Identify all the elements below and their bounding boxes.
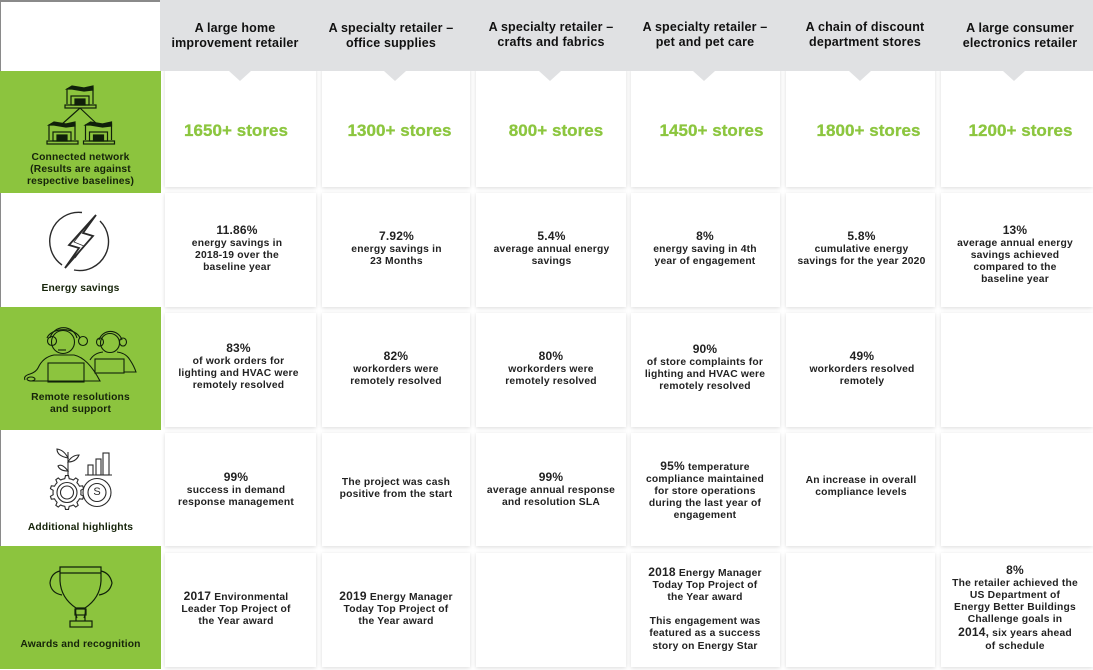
value: remote column 2: remotely resolved (350, 376, 442, 387)
value: awards column 1: the Year award (198, 616, 274, 627)
label: remote resolutions: Remote resolutions (31, 392, 130, 403)
value: awards column 4: featured as a success (649, 628, 761, 639)
value: energy column 6: compared to the (973, 262, 1057, 273)
value: awards column 6: The retailer achieved the (952, 578, 1078, 589)
value: energy column 2: 23 Months (370, 256, 423, 267)
icon: support agents (24, 327, 137, 383)
value: energy column 5: cumulative energy (815, 244, 908, 255)
icon: gears and chart (50, 448, 112, 510)
store count: column 2: 1300+ stores (347, 121, 452, 140)
value: energy column 5 (797, 229, 926, 267)
value: highlights column 2: The project was cash (342, 477, 450, 488)
value: energy column 2: energy savings in (351, 244, 442, 255)
value: highlights column 1 (178, 470, 294, 508)
value: remote column 4: lighting and HVAC were (645, 369, 765, 380)
value: energy column 5: savings for the year 2020 (797, 256, 926, 267)
value: awards column 6: 8% (1006, 563, 1024, 577)
value: remote column 4 (645, 342, 765, 392)
value: highlights column 1: response management (178, 497, 294, 508)
arrow: column 2 (384, 71, 406, 81)
store count: column 1: 1650+ stores (184, 121, 288, 140)
arrow: column 3 (539, 71, 561, 81)
value: energy column 3: savings (532, 256, 571, 267)
value: highlights column 4: for store operations (654, 486, 756, 497)
value: remote column 4: 90% (693, 342, 717, 356)
value: remote column 1: 83% (226, 341, 251, 355)
heading: crafts and fabrics (489, 20, 613, 49)
value: remote column 1: lighting and HVAC were (178, 368, 299, 379)
heading: crafts and fabrics: A specialty retailer – (489, 20, 613, 34)
value: awards column 4: 2018 Energy Manager (648, 565, 762, 579)
label: awards: Awards and recognition (20, 639, 141, 650)
label: connected network (27, 152, 134, 187)
value: awards column 6: US Department of (970, 590, 1060, 601)
value: highlights column 4: compliance maintained (646, 474, 764, 485)
value: awards column 1 (181, 589, 291, 627)
value: awards column 4 (648, 565, 762, 652)
heading: discount stores: A chain of discount (806, 20, 924, 34)
dollar sign in gear: S (93, 486, 101, 498)
value: remote column 1: of work orders for (193, 356, 284, 367)
heading: home improvement: A large home (195, 21, 275, 35)
header band (160, 0, 1093, 71)
value: energy column 6 (957, 223, 1073, 285)
value: awards column 2 (339, 589, 453, 627)
store count: column 6: 1200+ stores (968, 121, 1073, 140)
heading: consumer electronics: A large consumer (966, 21, 1074, 35)
value: highlights column 3: 99% (539, 470, 563, 484)
heading: home improvement: improvement retailer (171, 36, 299, 50)
label: remote resolutions: and support (50, 404, 111, 415)
value: remote column 2 (350, 349, 442, 387)
panel: connected network (0, 71, 161, 193)
value: energy column 1: 2018-19 over the (195, 250, 279, 261)
label: energy savings: Energy savings (41, 283, 120, 294)
value: energy column 4: energy saving in 4th (653, 244, 757, 255)
value: awards column 2: 2019 Energy Manager (339, 589, 453, 603)
value: energy column 6: savings achieved (971, 250, 1059, 261)
value: highlights column 4 (646, 459, 764, 521)
icon: trophy (49, 566, 113, 628)
value: highlights column 3: and resolution SLA (502, 497, 600, 508)
panel: energy savings (41, 212, 120, 294)
value: highlights column 1: success in demand (187, 485, 285, 496)
value: highlights column 3: average annual response (487, 485, 615, 496)
value: awards column 4: This engagement was (650, 616, 760, 627)
value: highlights column 4: engagement (674, 510, 736, 521)
arrow: column 5 (849, 71, 871, 81)
value: awards column 4: Today Top Project of (653, 580, 757, 591)
value: energy column 4: year of engagement (655, 256, 755, 267)
label: connected network: Connected network (32, 152, 129, 163)
value: remote column 5: workorders resolved (809, 364, 915, 375)
value: highlights column 2 (340, 477, 452, 500)
value: highlights column 3 (487, 470, 615, 508)
value: awards column 4: story on Energy Star (652, 641, 758, 652)
value: highlights column 1: 99% (224, 470, 248, 484)
heading: discount stores (806, 20, 924, 49)
store count: column 3: 800+ stores (509, 121, 603, 140)
value: remote column 3: remotely resolved (505, 376, 597, 387)
value: remote column 5: 49% (850, 349, 874, 363)
value: highlights column 5: compliance levels (815, 487, 907, 498)
value: energy column 2: 7.92% (379, 229, 414, 243)
value: awards column 2: Today Top Project of (344, 604, 448, 615)
value: energy column 6: average annual energy (957, 238, 1073, 249)
value: awards column 6: 2014, six years ahead (958, 625, 1072, 639)
heading: office supplies: office supplies (346, 36, 436, 50)
value: remote column 3 (505, 349, 597, 387)
value: highlights column 5: An increase in overall (806, 475, 916, 486)
heading: pet care: A specialty retailer – (643, 20, 767, 34)
arrow: column 6 (1003, 71, 1025, 81)
heading: pet care (643, 20, 767, 49)
value: energy column 3 (494, 229, 610, 267)
value: remote column 2: workorders were (353, 364, 439, 375)
value: awards column 1: Leader Top Project of (181, 604, 291, 615)
value: awards column 6: Challenge goals in (968, 614, 1062, 625)
value: remote column 5 (809, 349, 915, 387)
arrow: column 1 (229, 71, 251, 81)
value: energy column 2 (351, 229, 442, 267)
value: remote column 1 (178, 341, 299, 391)
value: awards column 6: Energy Better Buildings (954, 602, 1076, 613)
store count: column 4: 1450+ stores (659, 121, 764, 140)
icon: lightning in circle (49, 212, 110, 272)
value: remote column 5: remotely (840, 376, 884, 387)
panel: remote resolutions (0, 307, 161, 430)
value: energy column 1: 11.86% (216, 223, 258, 237)
heading: office supplies (329, 21, 453, 50)
heading: consumer electronics: electronics retailer (963, 36, 1077, 50)
value: energy column 4 (653, 229, 757, 267)
value: remote column 2: 82% (384, 349, 408, 363)
value: remote column 4: of store complaints for (647, 357, 763, 368)
label: additional highlights: Additional highlights (28, 522, 133, 533)
value: highlights column 4: during the last year of (649, 498, 761, 509)
label: connected network: respective baselines) (27, 176, 134, 187)
value: awards column 6: of schedule (985, 641, 1045, 652)
arrow: column 4 (693, 71, 715, 81)
store count: column 5: 1800+ stores (816, 121, 921, 140)
value: energy column 6: baseline year (981, 274, 1049, 285)
value: awards column 2: the Year award (358, 616, 434, 627)
heading: pet care: pet and pet care (656, 35, 754, 49)
value: awards column 1: 2017 Environmental (184, 589, 288, 603)
heading: office supplies: A specialty retailer – (329, 21, 453, 35)
value: remote column 1: remotely resolved (193, 380, 284, 391)
heading: discount stores: department stores (809, 35, 921, 49)
value: remote column 3: 80% (539, 349, 563, 363)
value: energy column 6: 13% (1003, 223, 1027, 237)
value: energy column 3: average annual energy (494, 244, 609, 255)
panel: awards (0, 546, 161, 669)
label: remote resolutions (31, 392, 130, 415)
value: energy column 1: baseline year (203, 262, 271, 273)
heading: home improvement (171, 21, 299, 50)
value: energy column 4: 8% (696, 229, 714, 243)
value: energy column 1 (192, 223, 282, 273)
value: awards column 6 (952, 563, 1078, 652)
value: highlights column 4: 95% temperature (660, 459, 750, 473)
heading: consumer electronics (963, 21, 1077, 50)
value: energy column 3: 5.4% (537, 229, 566, 243)
value: highlights column 5 (806, 475, 916, 498)
value: highlights column 2: positive from the start (340, 489, 452, 500)
value: energy column 5: 5.8% (847, 229, 876, 243)
heading: crafts and fabrics: crafts and fabrics (497, 35, 605, 49)
label: connected network: (Results are against (30, 164, 131, 175)
icon: connected stores (46, 85, 116, 145)
value: awards column 4: the Year award (667, 592, 743, 603)
value: energy column 1: energy savings in (192, 238, 282, 249)
panel: additional highlights (28, 448, 133, 533)
value: remote column 4: remotely resolved (659, 381, 751, 392)
value: remote column 3: workorders were (508, 364, 594, 375)
